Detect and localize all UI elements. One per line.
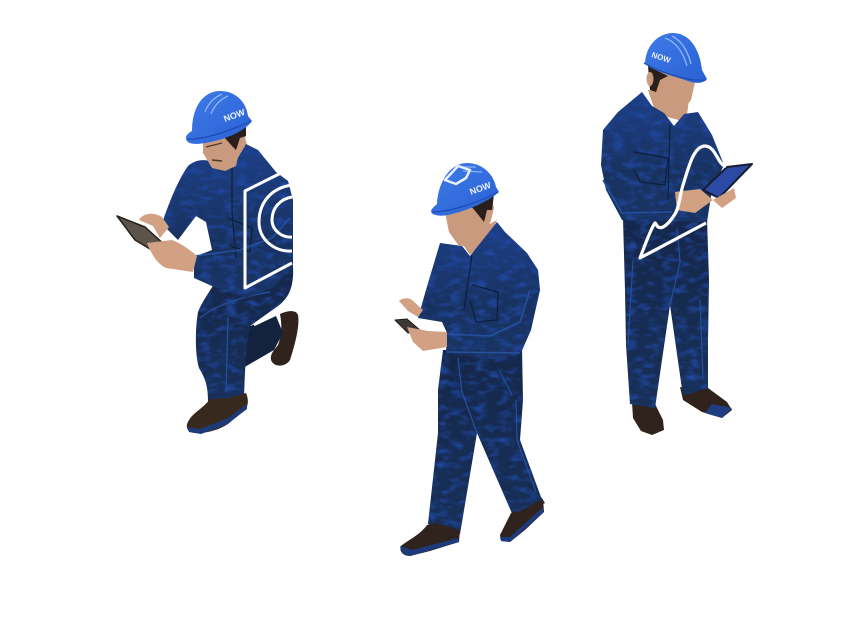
logo: NOW — [222, 107, 247, 124]
shirt — [418, 222, 540, 359]
white hat icon — [445, 166, 470, 184]
shirt — [601, 92, 724, 222]
logo: NOW — [650, 50, 672, 65]
head — [445, 200, 494, 246]
hands — [675, 189, 713, 213]
head — [203, 127, 246, 171]
right boot — [680, 387, 732, 418]
head — [655, 68, 695, 113]
logo: NOW — [468, 180, 493, 197]
left boot — [632, 402, 664, 435]
hard hat — [431, 163, 499, 216]
left boot — [400, 523, 460, 556]
hard hat — [643, 33, 707, 83]
neck — [460, 220, 497, 255]
back shin — [240, 316, 283, 368]
front boot — [187, 393, 248, 433]
hard hat — [186, 91, 252, 144]
ear — [646, 72, 654, 86]
tablet — [703, 164, 752, 198]
hands — [139, 214, 169, 238]
figure: walking worker with phone — [395, 163, 545, 556]
hands — [399, 298, 423, 317]
pants — [196, 266, 293, 402]
figure: kneeling worker with tablet — [117, 91, 298, 434]
pants — [428, 348, 545, 534]
tablet — [117, 216, 165, 249]
neck — [222, 140, 248, 172]
right boot — [500, 499, 544, 542]
pants — [623, 218, 709, 408]
phone — [395, 319, 421, 333]
back boot — [271, 311, 298, 366]
white outline icon — [245, 172, 292, 325]
neck — [648, 90, 690, 122]
figure: standing worker with tablet — [601, 33, 752, 435]
torso — [162, 144, 293, 298]
white curve icon — [640, 146, 726, 258]
